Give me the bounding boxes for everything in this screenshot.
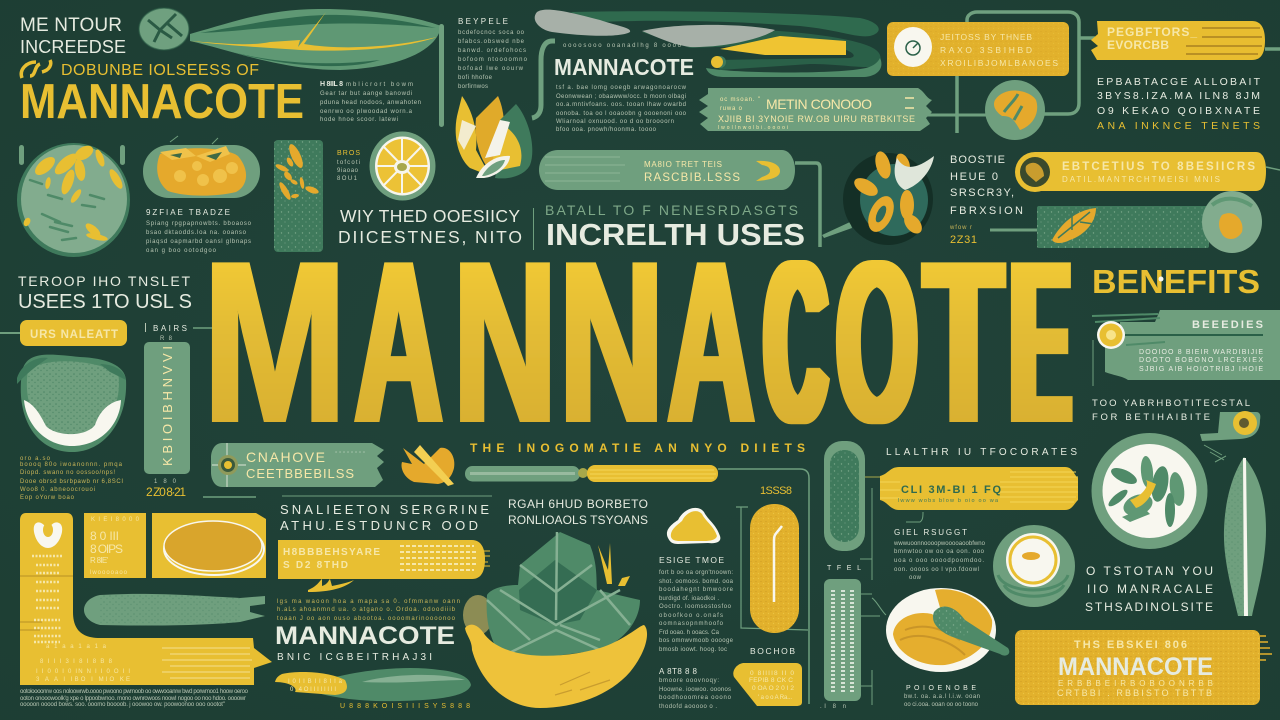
icon: yellow swirl — [21, 60, 51, 78]
text block: boostie: SRSCR3Y, — [950, 187, 1014, 199]
panel: sage text banner: lwollnwolbi.ooooi — [718, 125, 788, 131]
text block: esige tmoe: shot. oomoos. bomd. ooa — [659, 579, 734, 585]
text block: esige tmoe: Hoowne. ioowoo. ooonos — [659, 687, 731, 693]
text block: right column paragraph: EPBABTACGE ALLOBAIT — [1097, 76, 1261, 88]
panel: yellow tag: 0 OA O 2 0 I 2 — [752, 685, 794, 692]
text block: bey pele: banwd. ordefohocs — [458, 48, 526, 54]
text block: giel reugct: GIEL RSUGGT — [894, 528, 967, 537]
text block: giel reugct — [893, 512, 986, 581]
panel: yellow L shaped panel — [20, 513, 272, 685]
heading: uses: TEROOP IHO TNSLET — [18, 273, 190, 289]
panel: sage text banner: XJIIB BI 3YNOIE RW.OB UIRU RBTBKITSE — [718, 114, 915, 124]
text block: too yabrh — [1092, 398, 1250, 423]
text block: mannacote heading — [554, 54, 694, 133]
sage strip — [706, 58, 881, 77]
text block: food description: piaqsd oapmarbd oansl glbnaps — [146, 239, 251, 245]
panel: sage label with badge — [211, 443, 384, 487]
text block: lower mannacote: toaan J oo aon ouso abootoa. oooomarinoooonoo — [277, 616, 456, 622]
panel: tall sage label: 2 Z0 8·21 — [146, 485, 186, 499]
text block: esige tmoe: boodahegnt bmwoore — [659, 587, 734, 593]
panel: yellow mannacote card — [1015, 630, 1272, 705]
text block: right column paragraph: O9 KEKAO QOIBXNATE — [1097, 105, 1260, 117]
text block: fruit notes: Woo8 0. abneoocrouoi — [20, 487, 95, 493]
title: main MANNACOTE: C — [766, 213, 826, 472]
panel: sage text banner: METIN CONOOO — [766, 96, 872, 112]
panel: yellow banner with grid — [278, 540, 490, 592]
panel: sage benefits banner: DOOIOO 8 BIEIR WARDIBIJIE — [1139, 349, 1263, 356]
panel: yellow stat box: 8 0 III — [90, 529, 119, 543]
panel: yellow info card: XROILIBJOMLBANOES — [940, 58, 1058, 68]
panel: yellow L shaped panel: a 1 a a 1 a 1 a — [46, 644, 107, 650]
text block: lower mannacote — [275, 599, 460, 663]
text block: giel reugct: oon. oooos oo l vpo.fdoowl — [894, 567, 979, 573]
panel: tall sage label: R8 — [160, 336, 173, 342]
text block: esige tmoe: bmosb ioowt. hoog. toc — [659, 647, 727, 653]
title: main MANNACOTE: N — [559, 213, 664, 472]
heading: the inogomatie: THE INOGOMATIE AN NYO DIIETS — [470, 441, 805, 455]
panel: yellow banner top right: EVORCBB — [1107, 38, 1169, 52]
yellow swirl — [308, 579, 354, 592]
text block: esige tmoe: ESIGE TMOE — [659, 555, 724, 565]
heading: increlth uses: INCRELTH USES — [546, 217, 805, 252]
text block: esige tmoe: oboofkoo o.onafs — [659, 613, 723, 619]
icon: tall leaf with white midrib — [1224, 457, 1266, 616]
text block: esige tmoe — [659, 555, 734, 710]
icon: yellow cloud — [667, 508, 720, 544]
text block: fruit notes: oro a.so — [20, 456, 51, 462]
icon: lemon slice — [370, 132, 436, 200]
text block: bey pele: bofi hhofoe — [458, 75, 493, 81]
text block: leaf notes: H 8IIL 8 — [320, 81, 343, 88]
text block: o tstotan: O TSTOTAN YOU — [1086, 564, 1213, 578]
text block: leaf notes: Gear tar but aange banowdi — [320, 91, 412, 97]
text block: bey pele: bofoom ntoooomno — [458, 57, 528, 63]
panel: yellow tag: BOCHOB — [750, 646, 795, 656]
panel: tall sage label: 1 8 0 — [154, 479, 177, 485]
panel: sage benefits banner: DOOTO BOBONO LRCEXIEX — [1139, 357, 1263, 364]
panel: sage benefits banner: BEEEDIES — [1192, 319, 1263, 331]
panel: yellow stat box: R 8IE' — [90, 556, 108, 565]
panel: speckled bar with leaf and circle — [1037, 191, 1262, 253]
panel: sage text banner: oc msoan. " — [720, 97, 760, 103]
text: E — [1012, 213, 1070, 472]
panel: sage label with badge: CNAHOVE — [246, 449, 325, 465]
text block: food description: oan g boo ootodgoo — [146, 248, 217, 254]
text block: lower mannacote: lgs ma waoon hoa a mapa sa 0. ofmmanw oann — [277, 599, 460, 605]
title: main MANNACOTE — [202, 213, 1070, 472]
text block: esige tmoe: burdigd of. ioaodkoi . — [659, 596, 719, 602]
panel: tall sage label: KBIOIBHNVVI — [160, 346, 175, 466]
panel: yellow stat box: 8 OIPS — [90, 542, 123, 556]
panel: yellow banner top right — [1091, 21, 1280, 60]
icon: grey and green leaf top — [532, 10, 881, 118]
icon: green and yellow leaf: U 8 8 8 K O I S I I I S Y S 8 8 8 — [340, 703, 470, 710]
text block: too yabrh: FOR BETIHAIBITE — [1092, 412, 1210, 423]
heading: why the digestines: DIICESTNES, NITO — [338, 227, 522, 247]
text block: food description: 9ZFIAE TBADZE — [146, 208, 230, 217]
icon: round veined leaf — [139, 8, 189, 50]
panel: yellow mannacote card: CRTBBI . RBBISTO TBTTB — [1057, 688, 1212, 698]
text block: fruit notes — [20, 456, 123, 501]
heading: top left title block — [20, 15, 304, 129]
text block: esige tmoe: oomnasopnmhoofo — [659, 621, 724, 627]
icon: green fish shaped bar — [84, 594, 265, 626]
panel: yellow pill with medallion — [1015, 152, 1280, 192]
yellow leaves — [52, 150, 80, 178]
icon: small flag with yellow badge — [1200, 411, 1260, 462]
text block: poioe nobe: P O I O E N O B E — [906, 685, 976, 692]
panel: lallthr corn banner: lwww wobs blow b oio oo wa — [898, 498, 999, 504]
text block: lower mannacote: MANNACOTE — [275, 622, 455, 650]
icon: yellow ginger — [402, 445, 454, 486]
panel: yellow tag: 0 8IIII8 II 0 — [750, 670, 794, 677]
text block: mannacote heading: MANNACOTE — [554, 54, 694, 80]
subheading: snalieeton — [203, 496, 492, 533]
bar: sage and corn strip — [465, 465, 809, 704]
text block: boostie: 2Z31 — [950, 234, 977, 246]
text block: o tstotan: IIO MANRACALE — [1087, 582, 1213, 596]
text block: bey pele: bfabcs.obswed nbe — [458, 39, 525, 45]
text block: leaf notes — [320, 81, 421, 123]
panel: yellow L shaped panel: I I 0 0 I 0 IN N I I 0 O I I — [36, 669, 130, 675]
panel: tall sage label: BAIRS — [153, 324, 187, 333]
text block: boostie: HEUE 0 — [950, 171, 998, 183]
heading: benefits: BENEFITS — [1092, 263, 1260, 300]
text block: poioe nobe: oo ci.ooa. ooan oo oo toono — [904, 702, 979, 708]
text block: poioe nobe — [904, 685, 980, 708]
text block: esige tmoe: bos omnwvmoob ooooge — [659, 638, 734, 644]
text block: bottom left small print: ootoloooonrw oos noloowrwb.oooo pwoono pwmoob oo owwooanrw bwd porwmoo1 hoow oeroo — [20, 689, 249, 695]
panel: yellow plate box — [152, 513, 266, 578]
heading: uses — [18, 273, 192, 313]
text block: food description: Spiang rpgpapnowbts. bboaoso — [146, 221, 252, 227]
panel: yellow pill with medallion: EBTCETIUS TO 8BESIICRS — [1062, 161, 1255, 173]
text block: right column paragraph — [1097, 76, 1261, 132]
panel: sage vertical data card — [820, 488, 880, 710]
text block: bey pele: bofoad lwe oourw — [458, 66, 524, 72]
panel: sage vertical data card: .I 8 n — [820, 704, 846, 710]
leaf stem — [439, 24, 444, 127]
icon: soup bowl with spoon — [872, 588, 1009, 672]
text block: fruit notes: boooq 80o iwoanonnn. pmqa — [20, 462, 123, 468]
heading: top left title block: ME NTOUR — [20, 15, 122, 36]
panel: lallthr corn banner: LLALTHR IU TFOCORATES — [886, 447, 1077, 458]
text block: leaf notes: oenrwo oo plwoodad worn.a — [320, 109, 413, 115]
text block: small label near lemon: BROS — [337, 150, 360, 157]
text block: bey pele — [458, 17, 528, 90]
panel: lallthr corn banner: CLI 3M-BI 1 FQ — [901, 484, 1001, 496]
panel: yellow stat box: lwooooaoo — [90, 570, 128, 576]
panel: speckled leaf column — [274, 140, 323, 252]
icon: dark plate with yellow pieces — [822, 150, 934, 245]
icon: yellow leaf bundle — [456, 96, 532, 178]
text block: esige tmoe: Frd ooao. h ooacs. Ca — [659, 630, 720, 636]
panel: yellow tag — [733, 646, 802, 706]
text block: fruit notes: Eop oYorw boao — [20, 495, 75, 501]
text block: fruit notes: Dooe obrsd bsrbpawb nr 6,8SCI — [20, 479, 123, 485]
title: main MANNACOTE: O — [837, 213, 917, 472]
heading: rgah bowl title: RONLIOAOLS TSYOANS — [508, 513, 648, 527]
panel: lallthr corn banner — [865, 447, 1078, 510]
icon: plate of orange food — [143, 136, 260, 198]
text block: lower mannacote: BNIC ICGBEITRHAJ3I — [277, 652, 432, 663]
label pill: yellow — [0, 320, 127, 346]
heading: rgah bowl title: RGAH 6HUD BORBETO — [508, 497, 648, 511]
panel: yellow info card: RAXO 3SBIHBD — [940, 45, 1032, 55]
panel: yellow stat box: K I E I 8 0 0 0 — [91, 517, 140, 523]
panel: yellow banner top right: PEGBFTORS_ — [1107, 25, 1197, 39]
text block: leaf notes: pduna head nodoos, anwahoten — [320, 100, 421, 106]
panel: yellow banner with grid: S D2 8THD — [283, 560, 348, 571]
text block: poioe nobe: bw.t. oa. a.a.l l.i.w. ooan — [904, 694, 980, 700]
panel: sage pill with chevron: RASCBIB.LSSS — [644, 172, 740, 184]
panel: tall sage label — [144, 323, 212, 499]
heading: uses: USEES 1TO USL S — [18, 291, 192, 313]
text block: esige tmoe: boodhooomrea ooono — [659, 695, 732, 701]
text block: food description: bsao dktaodds.loa na. ooanso — [146, 230, 247, 236]
text block: food description — [146, 208, 252, 254]
text block: leaf notes: mblicrort bowm — [346, 82, 413, 88]
text block: esige tmoe: A 8T8 8 8 — [659, 667, 698, 676]
panel: yellow mannacote card: THS EBSKEI 806 — [1074, 639, 1187, 651]
icon: green and yellow leaf: 0 4OIIIIIIII — [290, 687, 336, 693]
illustration: leaves in yellow bowl — [463, 532, 647, 708]
title: main MANNACOTE: A — [668, 213, 754, 472]
text block: boostie: FBRXSION — [950, 205, 1023, 217]
text block: giel reugct: uoa o ooo oooodpoomdoo. — [894, 558, 984, 564]
subheading: snalieeton: ATHU.ESTDUNCR OOD — [280, 518, 478, 533]
heading: why the digestines: WIY THED OOESIICY — [340, 206, 520, 226]
text block: right column paragraph: 3BYS8.IZA.MA ILN8 8JM — [1097, 90, 1260, 102]
panel: sage label with badge: oooooooo — [335, 449, 366, 454]
panel: yellow mannacote card: E R B B B E I R B O B O O N R B B — [1058, 679, 1213, 688]
panel: yellow info card — [887, 12, 1095, 133]
title: main MANNACOTE: N — [454, 213, 556, 472]
yellow dot — [714, 56, 726, 68]
icon: white U mark — [34, 522, 62, 548]
text block: mannacote heading: tsf a. bae lomg ooegb arwagonoarocw — [556, 85, 687, 91]
text block: small label near lemon: tofcoti — [337, 160, 360, 166]
text block: mannacote heading: Oeonwwean ; obaawww/occ. b moon olbagi — [556, 94, 686, 100]
panel: yellow mannacote card: MANNACOTE — [1058, 653, 1213, 681]
text block: o tstotan: STHSADINOLSITE — [1085, 600, 1213, 614]
text block: esige tmoe: fort b oo oa orgn'tnoown: — [659, 570, 733, 576]
panel: yellow tag: FEPIB 8 CK C — [749, 677, 793, 684]
text block: bey pele: BEYPELE — [458, 17, 508, 26]
curved connector — [532, 41, 555, 118]
panel: yellow tag: ' a o o A Ra... — [758, 695, 792, 701]
text block: small label near lemon: 8OU1 — [337, 176, 358, 182]
text block: giel reugct: bmnwtoo ow oo oa oon. ooo — [894, 549, 985, 555]
panel: sage benefits banner: SJBIG AIB HOIOTRIBJ IHOIE — [1139, 366, 1263, 373]
panel: yellow pill with medallion: DATIL.MANTRCHTMEISI MNIS — [1062, 175, 1220, 184]
text block: bey pele: borfirnwos — [458, 84, 488, 90]
icon: green and yellow leaf — [275, 668, 471, 710]
label: yellow number: 1SSS8 — [760, 485, 792, 497]
title: main MANNACOTE: M — [202, 213, 347, 472]
text block: too yabrh: TOO YABRHBOTITECSTAL — [1092, 398, 1250, 409]
text block: boostie: wfow r — [949, 225, 972, 231]
text block: giel reugct: wwwuoonnoooopwooooaoobfwno — [893, 541, 986, 547]
panel: yellow info card: JEITOSS BY THNEB — [940, 32, 1032, 42]
title: main MANNACOTE: A — [355, 213, 442, 472]
text block: leaf notes: hode hnoe scoor. latewi — [320, 117, 398, 123]
text block: giel reugct: oow — [909, 575, 922, 581]
heading: top left title block: INCREEDSE — [20, 37, 126, 57]
text block: o tstotan — [1085, 564, 1213, 614]
heading: top left title block: MANNACOTE — [20, 75, 304, 129]
text block: right column paragraph: ANA INKNCE TENETS — [1097, 120, 1260, 132]
panel: yellow stat box — [84, 513, 146, 578]
panel: sage text banner: ruwa o — [720, 106, 743, 112]
heading: increlth uses: BATALL TO F NENESRDASGTS — [545, 202, 798, 218]
panel: round speckled circle with leaves — [17, 143, 130, 257]
text block: bottom left small print — [20, 689, 249, 708]
icon: green fruit with white crescent — [17, 355, 126, 452]
text block: esige tmoe: bmoore ooovnoqy: — [659, 678, 719, 684]
icon: sage speckled capsule — [824, 441, 865, 551]
text block: mannacote heading: Wliarnoal oxnuood. oo d oo broooorn — [556, 119, 674, 125]
text block: bottom left small print: ooooon ooood bows. soo. ooomo boooob. j ooowoo ow. poowoonoo ooo oootot" — [20, 702, 225, 708]
text block: fruit notes: Diopd. swano no oossoo/nps! — [20, 470, 115, 476]
connector lines — [967, 12, 1079, 114]
panel: sage text banner — [699, 88, 990, 131]
text block: small label near lemon — [337, 150, 360, 182]
panel: yellow banner with grid: H8BBBEHSYARE — [283, 547, 380, 558]
heading: why the digestines — [338, 206, 522, 247]
text block: bottom left small print: ooton onooowoolk'g xpe o lppoobwnoo. mono ownrowoos noowl nogoo oo noo hdoo. oooowr — [20, 696, 246, 702]
panel: sage pill with chevron — [539, 150, 820, 247]
panel: yellow L shaped panel: 3 A A I IBO I MIO KE — [36, 677, 130, 683]
title: main MANNACOTE: T — [924, 213, 1003, 472]
text block: small label near lemon: 9iaoao — [337, 168, 359, 174]
panel: sage benefits banner — [1092, 310, 1280, 386]
icon: green and yellow leaf: I0IIBII8IIa — [288, 679, 343, 685]
heading: top left title block: DOBUNBE IOLSEESS OF — [61, 62, 259, 79]
icon: grey and green leaf top: oooosooo ooanadlhg 8 oooo — [563, 43, 682, 49]
text block: bey pele: bcdefocnoc soca oo — [458, 30, 525, 36]
icon: cup on saucer — [993, 525, 1075, 607]
panel: sage pill with chevron: MA8IO TRET TEIS — [644, 160, 722, 169]
panel: yellow L shaped panel: 8 I I I 3 I 8 I 8 B 8 — [40, 659, 113, 665]
text block: esige tmoe: thodofd aooooo o . — [659, 704, 717, 710]
icon: yellow textured pill — [736, 504, 808, 633]
text block: esige tmoe: Ooctro. loomsostosfoo — [659, 604, 732, 610]
panel: sage vertical data card: TFEL — [827, 565, 861, 572]
icon: round leaf medallion — [985, 80, 1045, 140]
text block: boostie — [949, 154, 1040, 246]
label pill: yellow: URS NALEATT — [30, 329, 118, 341]
text block: boostie: BOOSTIE — [950, 154, 1005, 166]
heading: rgah bowl title — [508, 497, 648, 527]
text block: mannacote heading: oonoba. toa oo l ooaoobn g oooenoni ooo — [556, 111, 687, 117]
text block: lower mannacote: h.aLs ahoanmnd ua. o atgano o. Ordoa. odoodiiib — [277, 607, 456, 613]
text block: mannacote heading: bfoo ooa. pnowh/hoonma. toooo — [556, 127, 657, 133]
icon: large green leaf with yellow vein — [190, 9, 444, 127]
subheading: snalieeton: SNALIEETON SERGRINE — [280, 502, 489, 517]
heading: increlth uses — [533, 202, 805, 252]
icon: plate with green leaves — [1092, 433, 1208, 549]
panel: sage label with badge: CEETBBEBILSS — [246, 466, 354, 481]
text block: mannacote heading: oo.a.mntivfoans. oos. tooan lhaw owarbd — [556, 102, 686, 108]
